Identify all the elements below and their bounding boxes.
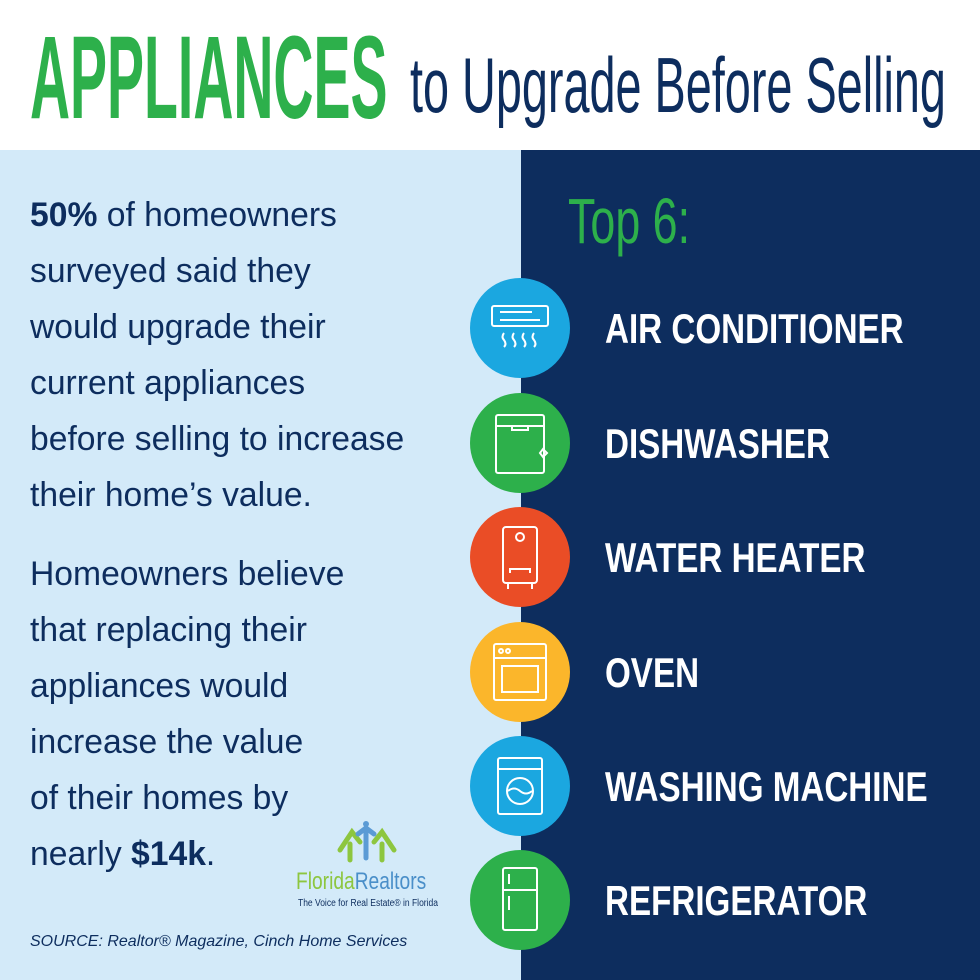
item: washing machine: WASHING MACHINE [605, 763, 928, 810]
text block: value: nearly $14k. [30, 835, 215, 873]
item: air conditioner [470, 278, 904, 378]
item: water heater: WATER HEATER [605, 534, 866, 581]
item: oven: OVEN [605, 649, 699, 696]
text block: survey stat: before selling to increase [30, 420, 404, 458]
title: APPLIANCES [30, 12, 387, 144]
title: to Upgrade Before Selling [410, 41, 946, 129]
source: SOURCE: Realtor® Magazine, Cinch Home Services [30, 933, 407, 950]
item: washing machine [470, 736, 928, 836]
text block: survey stat [30, 196, 404, 514]
text block: value: Homeowners believe [30, 555, 344, 593]
text block: value: of their homes by [30, 779, 288, 817]
icon: oven [470, 622, 570, 722]
item: dishwasher: DISHWASHER [605, 420, 830, 467]
item: oven [470, 622, 699, 722]
heading: Top 6: Top 6: [568, 185, 690, 257]
text block: survey stat: current appliances [30, 364, 305, 402]
icon: air conditioner [470, 278, 570, 378]
logo: Florida Realtors: FloridaRealtors [296, 868, 426, 895]
item: refrigerator: REFRIGERATOR [605, 877, 867, 924]
text block: value [30, 555, 344, 873]
title [30, 12, 946, 144]
item: refrigerator [470, 850, 867, 950]
text block: value: appliances would [30, 667, 288, 705]
text block: value: increase the value [30, 723, 303, 761]
item: dishwasher [470, 393, 830, 493]
header background [0, 0, 980, 150]
icon: refrigerator [470, 850, 570, 950]
logo: Florida Realtors: The Voice for Real Estate® in Florida [298, 898, 438, 909]
icon: dishwasher [470, 393, 570, 493]
logo: Florida Realtors [296, 821, 438, 909]
text block: survey stat: their home’s value. [30, 476, 312, 514]
panel: left [0, 150, 521, 980]
item: water heater [470, 507, 866, 607]
text block: survey stat: 50% of homeowners [30, 196, 337, 234]
text block: value: that replacing their [30, 611, 307, 649]
panel: right [521, 150, 980, 980]
text block: survey stat: would upgrade their [30, 308, 326, 346]
text block: survey stat: surveyed said they [30, 252, 311, 290]
icon: water heater [470, 507, 570, 607]
item: air conditioner: AIR CONDITIONER [605, 305, 904, 352]
icon: washing machine [470, 736, 570, 836]
